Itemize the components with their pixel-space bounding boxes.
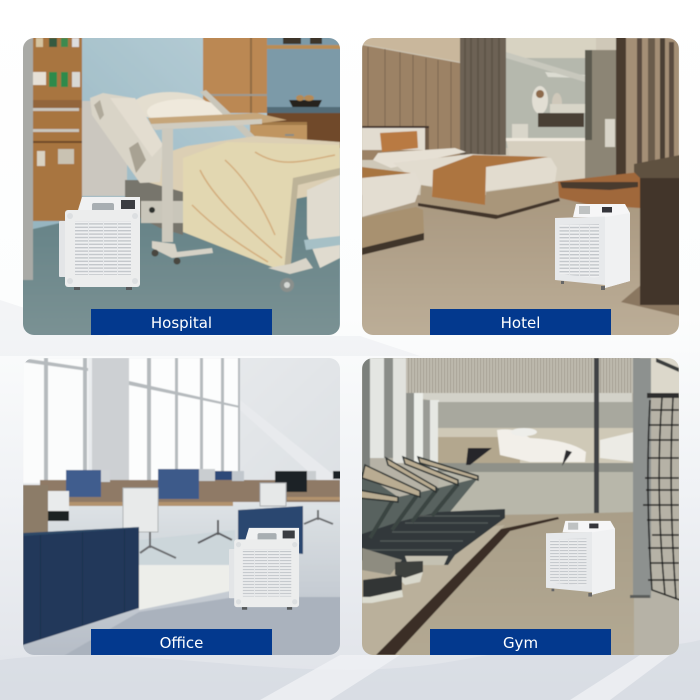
post and wire sculpture — [630, 358, 680, 600]
icon: dehumidifier — [546, 521, 615, 597]
gym scene — [359, 355, 682, 660]
label: Hospital — [91, 309, 272, 335]
label: Hotel — [430, 309, 611, 335]
bathroom — [506, 38, 596, 148]
desks — [40, 469, 341, 506]
panel: office — [20, 355, 343, 658]
hospital room scene — [20, 35, 343, 338]
hotel room scene — [359, 35, 682, 338]
curtain — [460, 35, 506, 155]
glass mural — [438, 358, 634, 514]
wall panels — [362, 45, 460, 160]
open office scene — [20, 355, 343, 658]
bed — [90, 90, 340, 292]
navy counter — [23, 485, 139, 645]
pillars — [362, 358, 439, 473]
floor and inlay — [359, 512, 634, 660]
beds — [362, 126, 560, 255]
icon: dehumidifier — [555, 204, 630, 290]
treadmills — [359, 457, 505, 603]
panel: gym — [359, 355, 682, 660]
icon: dehumidifier — [229, 528, 299, 610]
over-bed table — [148, 113, 287, 264]
label: Office — [91, 629, 272, 655]
label: Hospital: Hospital — [151, 314, 212, 332]
windows — [23, 358, 240, 483]
label: Hotel: Hotel — [501, 314, 540, 332]
label: Gym: Gym — [503, 634, 538, 652]
label: Office: Office — [160, 634, 203, 652]
mesh ceiling — [406, 358, 633, 392]
icon: dehumidifier — [59, 197, 140, 290]
wood wall panel with outlets — [33, 35, 82, 221]
panel: hospital — [20, 35, 343, 338]
chairs — [48, 483, 333, 558]
panel: hotel — [359, 35, 682, 338]
counter — [621, 155, 680, 316]
glass partition — [585, 35, 679, 188]
label: Gym — [430, 629, 611, 655]
